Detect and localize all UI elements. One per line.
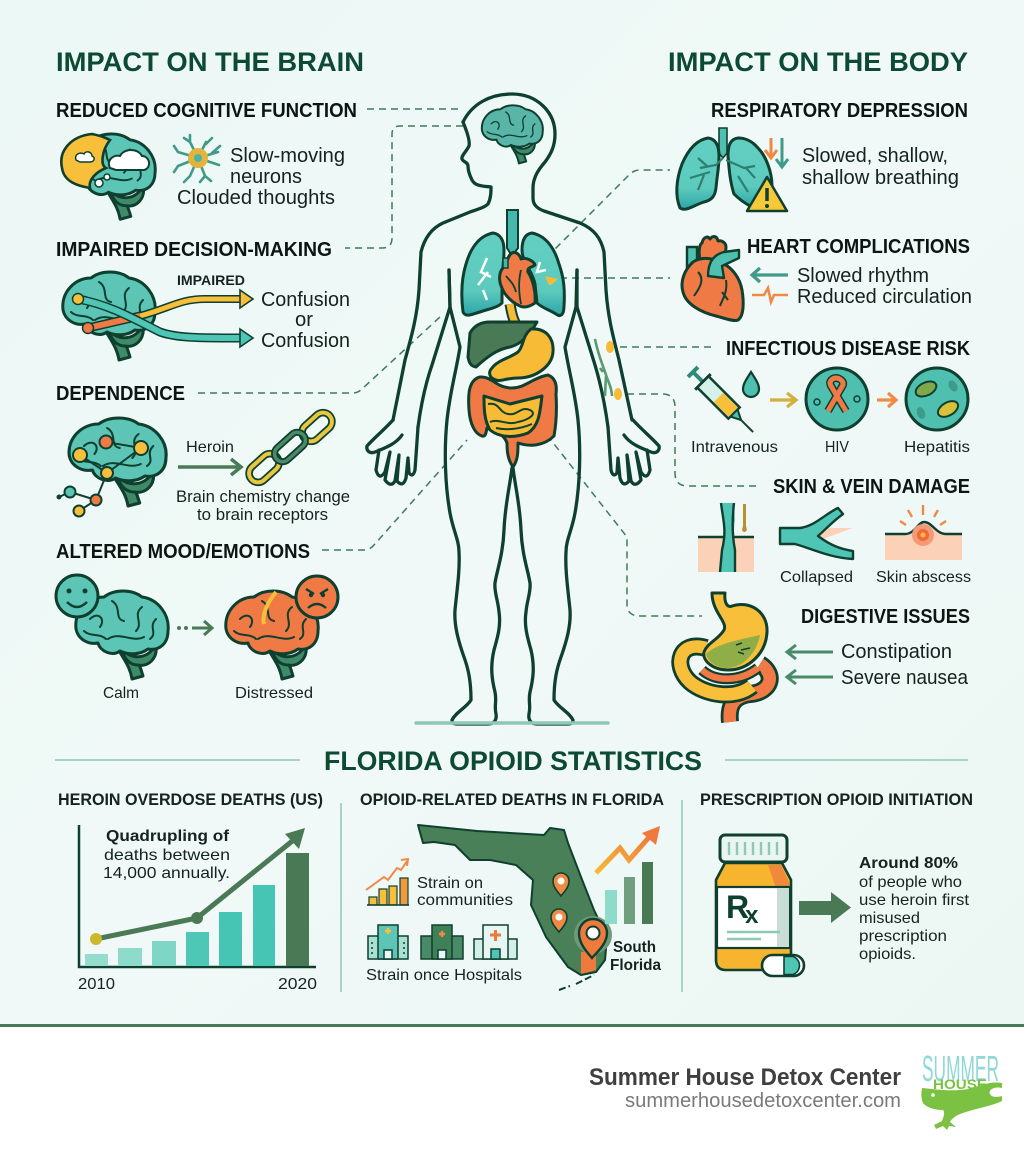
icon: lungs with warning xyxy=(677,128,787,211)
text: to brain receptors: to brain receptors xyxy=(197,505,328,524)
organ: arm veins xyxy=(595,339,622,400)
organ: brain xyxy=(482,105,543,163)
icon: pill bottle: x xyxy=(745,902,759,929)
organ: large intestine xyxy=(469,375,556,467)
text: around 80%: Around 80% xyxy=(859,855,958,872)
label: heroin: Heroin xyxy=(186,439,234,456)
arrow: calm to distressed xyxy=(177,621,212,635)
label: hiv: HIV xyxy=(825,439,849,456)
heading: RESPIRATORY DEPRESSION xyxy=(711,100,968,122)
icon: neuron xyxy=(174,135,220,182)
section: digestive issues xyxy=(680,593,970,722)
text: confusion: Confusion xyxy=(261,330,350,352)
panel: prescription opioid initiation xyxy=(700,790,973,976)
panel dividers xyxy=(341,800,682,992)
organ: small intestine xyxy=(484,396,542,436)
icon: down arrows xyxy=(765,138,788,167)
text: slowed rhythm: Slowed rhythm xyxy=(797,265,929,287)
icon: collapsed vein xyxy=(780,508,853,559)
icon: distressed brain with angry face xyxy=(226,576,338,679)
text: around 80%: opioids. xyxy=(859,946,916,963)
section: infectious disease risk xyxy=(685,338,971,456)
icon: brain with crossing pathways xyxy=(63,272,253,360)
icon: community chart xyxy=(366,859,409,905)
footer: website: summerhousedetoxcenter.com xyxy=(625,1090,901,1112)
text: reduced circulation: Reduced circulation xyxy=(797,286,972,308)
icon: calm brain with smiling face xyxy=(56,575,168,679)
axis label: 2010: 2010 xyxy=(78,976,115,993)
icon: syringe xyxy=(685,364,761,440)
text: shallow breathing: shallow breathing xyxy=(802,167,959,189)
label: calm: Calm xyxy=(103,685,139,702)
icon: rising bars and arrow xyxy=(596,826,660,924)
heading: DEPENDENCE xyxy=(56,383,185,405)
text: neurons: neurons xyxy=(230,166,302,188)
text: brain chemistry change: Brain chemistry change xyxy=(176,487,350,506)
heading: OPIOID-RELATED DEATHS IN FLORIDA xyxy=(360,790,664,809)
ground line xyxy=(416,721,608,725)
panel: heroin overdose deaths xyxy=(58,790,323,993)
heading: INFECTIOUS DISEASE RISK xyxy=(726,338,971,360)
text: confusion: Confusion xyxy=(261,289,350,311)
label: south florida xyxy=(610,939,661,974)
icon: pill bottle: R xyxy=(726,889,749,925)
text: strain on communities xyxy=(417,875,513,909)
text: or: or xyxy=(295,309,313,331)
organ: stomach xyxy=(490,329,553,381)
icon: brain receptor network xyxy=(56,418,166,516)
text: constipation: Constipation xyxy=(841,641,952,663)
heading: PRESCRIPTION OPIOID INITIATION xyxy=(700,790,973,809)
heading: HEROIN OVERDOSE DEATHS (US) xyxy=(58,790,323,809)
text: strain on communities: Strain on xyxy=(417,875,483,892)
section: reduced cognitive function xyxy=(56,100,357,219)
heading: IMPAIRED DECISION-MAKING xyxy=(56,239,332,261)
section: skin and vein damage xyxy=(698,476,971,586)
text: slow-moving neurons: Slow-moving xyxy=(230,145,345,167)
organ: esophagus fill xyxy=(510,304,518,328)
organ: heart xyxy=(500,252,535,307)
icon: vein in skin xyxy=(698,503,754,572)
bar chart xyxy=(79,825,316,967)
section: dependence xyxy=(56,383,350,524)
icon: clouded brain xyxy=(61,134,155,219)
text: around 80%: of people who xyxy=(859,874,962,891)
text: around 80%: use heroin first xyxy=(859,892,970,909)
text: around 80%: misused xyxy=(859,910,920,927)
icon: ecg trace xyxy=(752,288,788,302)
footer xyxy=(0,1024,1024,1154)
axis label: 2020: 2020 xyxy=(278,976,317,993)
arrow: heroin to chain xyxy=(178,459,241,475)
logo: summer house gecko xyxy=(921,1048,1002,1130)
title: impact on the brain: IMPACT ON THE BRAIN xyxy=(56,47,364,77)
heading: ALTERED MOOD/EMOTIONS xyxy=(56,541,310,563)
icon: hospital 3 xyxy=(474,925,517,959)
section: impaired decision-making xyxy=(56,239,350,360)
label: collapsed: Collapsed xyxy=(780,569,853,586)
text: severe nausea: Severe nausea xyxy=(841,667,969,689)
icon: chain xyxy=(245,409,336,486)
organ: liver xyxy=(468,322,537,367)
label: intravenous: Intravenous xyxy=(691,439,778,456)
icon: digestive tract xyxy=(680,593,770,722)
callout text: 14,000 annually. xyxy=(103,865,230,882)
text: strain on communities: communities xyxy=(417,892,513,909)
human body figure xyxy=(367,94,659,724)
arrow: severe nausea xyxy=(787,670,833,684)
icon: skin abscess xyxy=(885,505,962,560)
label: hepatitis: Hepatitis xyxy=(904,439,970,456)
callout text xyxy=(103,828,230,882)
logo: summer house gecko: HOUSE xyxy=(933,1076,987,1092)
text: around 80%: prescription xyxy=(859,928,947,945)
section heading: florida opioid statistics: FLORIDA OPIOID STATISTICS xyxy=(324,746,702,776)
label: south florida: South xyxy=(613,939,656,956)
panel: opioid-related deaths in florida xyxy=(360,790,664,990)
callout text: Quadrupling of xyxy=(106,828,230,845)
organ: esophagus xyxy=(510,304,518,328)
heading: REDUCED COGNITIVE FUNCTION xyxy=(56,100,357,122)
arrow: bottle to statistic xyxy=(799,892,851,923)
text: clouded thoughts: Clouded thoughts xyxy=(177,187,335,209)
right hand xyxy=(608,420,659,484)
label: skin abscess: Skin abscess xyxy=(876,569,971,586)
arrow: to hiv xyxy=(770,393,796,407)
section: altered mood xyxy=(56,541,338,702)
organ: trachea xyxy=(507,210,518,256)
icon: hospital 1 xyxy=(368,925,408,959)
text: strain once hospitals: Strain once Hospitals xyxy=(366,967,522,984)
dashed connectors xyxy=(198,109,760,616)
heading: DIGESTIVE ISSUES xyxy=(801,606,970,628)
section: heart complications xyxy=(682,236,972,321)
footer: organisation name: Summer House Detox Center xyxy=(589,1064,901,1091)
arrow: to hepatitis xyxy=(877,393,896,407)
text: around 80% xyxy=(859,855,970,963)
trend arrow xyxy=(90,828,305,945)
icon: hepatitis bacteria xyxy=(906,368,968,430)
arrow: slowed rhythm xyxy=(752,268,788,282)
callout text: deaths between xyxy=(104,847,230,864)
heading: SKIN & VEIN DAMAGE xyxy=(773,476,970,498)
text: slowed, shallow: Slowed, shallow, xyxy=(802,145,948,167)
heading: HEART COMPLICATIONS xyxy=(747,236,970,258)
body outline xyxy=(393,94,632,724)
icon: florida map xyxy=(418,825,612,990)
icon: heart xyxy=(682,237,743,321)
icon: hospital 2 xyxy=(421,925,463,959)
label: south florida: Florida xyxy=(610,957,661,974)
icon: droplet xyxy=(743,372,759,397)
title: impact on the body: IMPACT ON THE BODY xyxy=(668,47,968,77)
label: distressed: Distressed xyxy=(235,685,313,702)
icon: pill bottle xyxy=(716,835,804,976)
left hand xyxy=(367,420,418,484)
icon: hiv ribbon xyxy=(806,368,868,430)
section: respiratory depression xyxy=(677,100,968,211)
arrow: constipation xyxy=(787,645,833,659)
label: impaired: IMPAIRED xyxy=(177,272,245,288)
organ: lungs xyxy=(462,233,564,316)
